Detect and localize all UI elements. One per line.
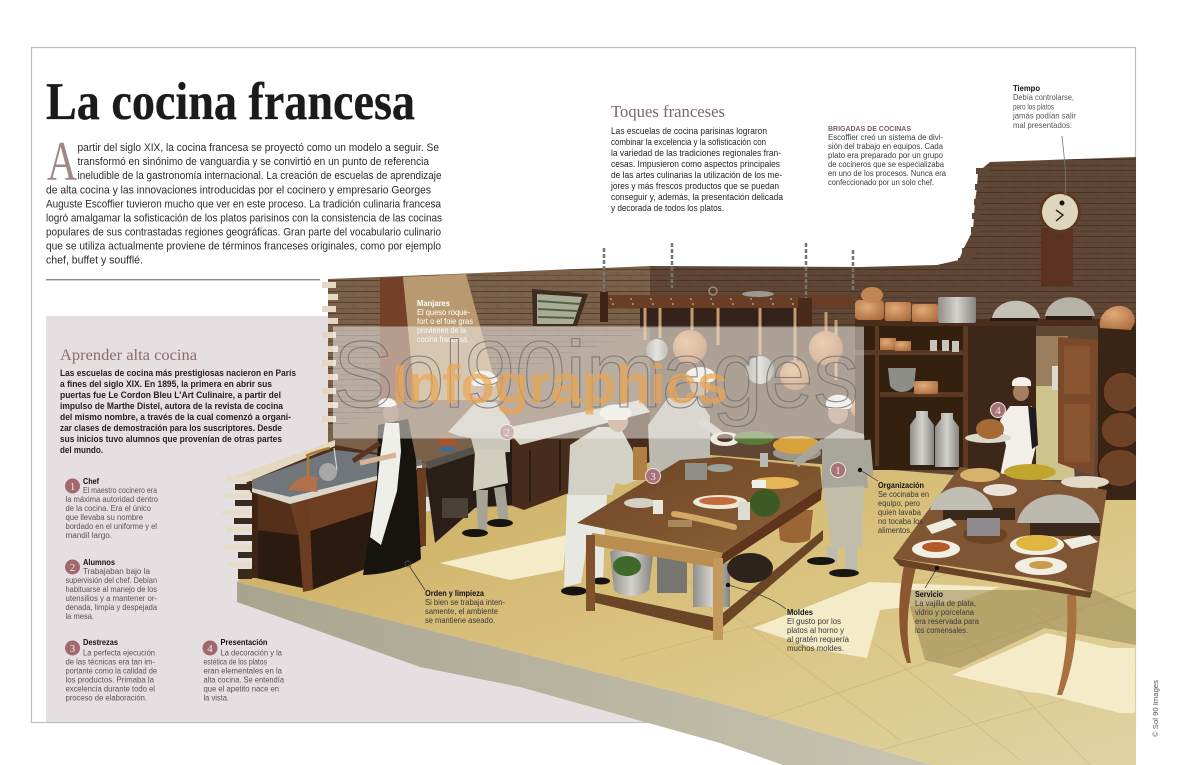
text: Aprender alta cocina body: puertas fue Le Cordon Bleu L'Art Culinaire, a partir del <box>60 390 281 401</box>
text: Toques franceses body: de las artes culinarias la utilización de los me- <box>611 170 782 181</box>
item 4: Presentación: que el apetito nace en <box>204 684 279 694</box>
chimney hood <box>380 274 500 400</box>
chef behind table <box>648 367 740 474</box>
intro text block: chef, buffet y soufflé. <box>46 254 143 266</box>
label: Orden y limpieza: Si bien se trabaja inten- <box>425 598 505 607</box>
item 1: Chef: bordado en el uniforme y el <box>66 522 157 531</box>
item 2: Alumnos: habituarse al manejo de los <box>66 585 157 594</box>
label: Manjares: provienen de la <box>417 326 467 335</box>
text: Toques franceses body: cesas. Impusieron como aspectos principales <box>611 159 780 170</box>
clock <box>1039 191 1081 286</box>
intro text block: ineludible de la gastronomía internacional. La creación de escuelas de aprendizaje <box>78 170 442 182</box>
item 3: Destrezas: proceso de elaboración. <box>66 694 147 702</box>
text: Brigadas de cocinas: sión del trabajo en equipos. Cada <box>828 142 944 151</box>
item 4: Presentación: 4 <box>207 643 213 655</box>
text: Aprender alta cocina body: a fines del siglo XIX. En 1895, la primera en abrir sus <box>60 379 272 390</box>
intro text block: transformó en sinónimo de vanguardia y se convirtió en un punto de referencia <box>78 156 430 168</box>
item 3: Destrezas: portante como la calidad de <box>66 666 157 676</box>
service table <box>893 464 1109 695</box>
item 4: Presentación: La decoración y la <box>220 648 283 658</box>
label: Moldes: muchos moldes. <box>787 644 844 653</box>
label: Servicio: vidrio y porcelana <box>915 608 975 617</box>
intro text block: logró amalgamar la sofisticación de los platos parisinos con la consistencia de las cocinas <box>46 212 442 224</box>
item 2: Alumnos: la mesa. <box>66 612 94 621</box>
credit: © Sol 90 Images <box>1151 680 1160 737</box>
watermark: Sol90images <box>333 322 859 428</box>
item 4: Presentación <box>202 638 285 702</box>
text: Toques franceses body: Las escuelas de cocina parisinas lograron <box>611 126 767 137</box>
text: Toques franceses body <box>610 126 784 214</box>
label: Manjares <box>417 299 473 344</box>
heading: Aprender alta cocina: Aprender alta cocina <box>60 347 197 364</box>
item 2: Alumnos <box>65 558 158 621</box>
intro text block: de alta cocina y las innovaciones introducidas por el cocinero y empresario Georges <box>46 184 431 196</box>
item 4: Presentación: eran elementales en la <box>204 666 283 676</box>
label: Tiempo: jamás podían salir <box>1012 112 1076 120</box>
label: Organización: Organización <box>878 481 924 490</box>
intro text block <box>46 131 442 266</box>
item 3: Destrezas: de las técnicas era tan im- <box>66 658 155 666</box>
label: Manjares: El queso roque- <box>417 308 470 317</box>
item 2: Alumnos: Trabajaban bajo la <box>83 567 151 576</box>
woman at sink <box>353 398 421 575</box>
floor <box>237 450 1136 765</box>
label: Servicio <box>915 566 980 635</box>
number badges: 4 <box>995 405 1001 417</box>
jagged wall edge right <box>958 168 990 264</box>
wall top bricks above sink <box>232 440 335 483</box>
number badges: 2 <box>504 427 510 439</box>
item 1: Chef <box>65 477 159 540</box>
label: Manjares: cocina francesa. <box>417 335 469 344</box>
label: Servicio: Servicio <box>915 590 943 599</box>
window <box>532 289 588 326</box>
label: Orden y limpieza: Orden y limpieza <box>425 589 484 598</box>
label: Manjares: Manjares <box>417 299 451 308</box>
label: Orden y limpieza <box>405 561 505 625</box>
chef 3 <box>561 404 640 596</box>
watermark: Infographics <box>392 353 728 415</box>
item 3: Destrezas <box>65 638 157 702</box>
text: Brigadas de cocinas: confeccionado por un solo chef. <box>828 178 934 187</box>
item 1: Chef: la máxima autoridad dentro <box>66 495 159 504</box>
student chef 2 <box>448 371 513 537</box>
milk cans <box>910 411 959 467</box>
text: Toques franceses body: jores y más frescos productos que se puedan <box>610 181 779 192</box>
brick texture <box>328 157 1136 430</box>
panel: kitchen illustration <box>222 157 1143 765</box>
number badges <box>500 402 1006 484</box>
intro text block: populares de sus contrastadas regiones geográficas. Gran parte del vocabulario culinario <box>46 226 441 238</box>
label: Servicio: los comensales. <box>915 626 968 635</box>
text: Brigadas de cocinas: en uno de los procesos. Nunca era <box>828 169 947 178</box>
text: Brigadas de cocinas: BRIGADAS DE COCINAS <box>828 124 911 133</box>
barrels <box>1097 372 1136 486</box>
label: Organización: equipo, pero <box>878 499 921 508</box>
back wall left <box>328 266 650 520</box>
label: Moldes: El gusto por los <box>787 617 841 626</box>
item 3: Destrezas: La perfecta ejecución <box>83 648 155 658</box>
label: Orden y limpieza: se mantiene aseado. <box>425 616 495 625</box>
item 1: Chef: mandil largo. <box>66 531 112 540</box>
item 1: Chef: de la cocina. Era el único <box>66 504 152 513</box>
pots on top shelf <box>855 287 1135 394</box>
leader: Tiempo <box>1062 136 1066 196</box>
back counter <box>505 400 650 510</box>
item 2: Alumnos: supervisión del chef. Debían <box>66 576 157 585</box>
item 4: Presentación: la vista. <box>204 694 229 702</box>
text: Aprender alta cocina body: impulso de Marthe Distel, autora de la revista de cocina <box>60 401 284 412</box>
label: Servicio: era reservada para <box>915 617 980 626</box>
text: Brigadas de cocinas: plato era preparado por un grupo <box>828 151 944 160</box>
jagged wall edge left <box>322 282 338 422</box>
label: Organización: Se cocinaba en <box>878 490 929 499</box>
item 2: Alumnos: utensilios y a mantener or- <box>66 594 157 603</box>
text: Aprender alta cocina body <box>60 368 296 456</box>
label: Organización: no tocaba los <box>878 517 923 526</box>
item 3: Destrezas: Destrezas <box>83 638 118 647</box>
item 1: Chef: 1 <box>70 481 75 493</box>
shadow under service table <box>905 590 1136 668</box>
label: Tiempo: Tiempo <box>1013 84 1040 93</box>
label: Tiempo: mal presentados. <box>1013 121 1072 130</box>
text: Toques franceses body: conseguir y, además, la presentación delicada <box>611 192 784 203</box>
number badges: 3 <box>650 471 656 483</box>
label: Organización: alimentos. <box>878 526 912 535</box>
label: Organización <box>858 468 929 535</box>
maid with roast <box>965 377 1038 474</box>
item 3: Destrezas: los productos. Primaba la <box>66 676 155 684</box>
text: Aprender alta cocina body: del mundo. <box>60 445 103 456</box>
item 4: Presentación: alta cocina. Se entendía <box>204 676 285 684</box>
sunlight patches <box>440 535 1135 713</box>
text: Brigadas de cocinas: Escoffier creó un sistema de divi- <box>828 133 943 142</box>
shelves <box>855 319 1136 472</box>
label: Tiempo: Debía controlarse, <box>1013 93 1074 102</box>
text: Brigadas de cocinas: de cocineros que se especializaba <box>828 160 945 169</box>
central table <box>577 447 823 640</box>
label: Tiempo: pero los platos <box>1013 102 1054 112</box>
intro text block: que se utiliza actualmente proviene de términos franceses originales, como por ejemplo <box>46 240 441 252</box>
floor tile lines <box>620 560 1136 765</box>
label: Manjares: fort o el foie gras <box>417 317 473 326</box>
item 1: Chef: que llevaba su nombre <box>66 513 143 522</box>
label: Moldes: platos al horno y <box>787 626 844 635</box>
sink counter <box>252 448 426 592</box>
label: Moldes <box>726 583 850 653</box>
item 2: Alumnos: Alumnos <box>83 558 116 567</box>
stove <box>425 434 512 543</box>
intro text block: Auguste Escoffier tuvieron mucho que ver en este proceso. La tradición culinaria francesa <box>46 198 442 210</box>
label: Tiempo <box>1012 84 1076 130</box>
text: Toques franceses body: y decorada de todos los platos. <box>611 203 724 214</box>
panel: aprender alta cocina background <box>46 316 746 722</box>
item 2: Alumnos: denada, limpia y despejada <box>66 603 158 612</box>
intro text block: partir del siglo XIX, la cocina francesa se proyectó como un modelo a seguir. Se <box>78 142 439 154</box>
item 4: Presentación: estética de los platos <box>204 658 267 666</box>
text: Aprender alta cocina body: sus inicios tuvo alumnos que provenían de otras partes <box>60 434 282 445</box>
number badges: 1 <box>835 465 841 477</box>
title: La cocina francesa <box>46 73 415 131</box>
label: Servicio: La vajilla de plata, <box>915 599 976 608</box>
wall behind sink <box>245 445 425 495</box>
label: Moldes: al gratén requería <box>787 635 850 644</box>
text: Toques franceses body: combinar la excelencia y la sofisticación con <box>611 137 766 148</box>
item 2: Alumnos: 2 <box>70 562 75 574</box>
divider rule <box>46 279 320 280</box>
label: Moldes: Moldes <box>787 608 814 617</box>
text: Toques franceses body: la variedad de las tradiciones regionales fran- <box>611 148 781 159</box>
heading: Toques franceses: Toques franceses <box>611 102 725 121</box>
intro text block: A <box>47 131 77 193</box>
cabinet and doorway <box>968 326 1136 500</box>
hanging copper pans <box>645 308 874 419</box>
concrete slab <box>237 582 933 765</box>
back wall middle and right <box>650 157 1136 500</box>
item 1: Chef: El maestro cocinero era <box>83 486 158 495</box>
item 3: Destrezas: 3 <box>70 643 76 655</box>
text: Aprender alta cocina body: Las escuelas de cocina más prestigiosas nacieron en París <box>60 368 296 379</box>
pot rack <box>600 243 853 328</box>
label: Orden y limpieza: samente, el ambiente <box>425 607 498 616</box>
label: Organización: quien lavaba <box>878 508 922 517</box>
item 1: Chef: Chef <box>83 477 99 486</box>
item 4: Presentación: Presentación <box>220 638 268 647</box>
text: Brigadas de cocinas <box>828 124 947 187</box>
left broken brick edge <box>222 476 252 579</box>
fruit bowl and greens <box>734 431 821 461</box>
text: Aprender alta cocina body: zar clases de demostración para los suscriptores. Desde <box>60 423 282 434</box>
text: Aprender alta cocina body: del mismo nombre, a través de la cual comenzó a organi- <box>60 412 291 423</box>
item 3: Destrezas: excelencia durante todo el <box>66 684 155 694</box>
chef 1 <box>796 395 869 577</box>
